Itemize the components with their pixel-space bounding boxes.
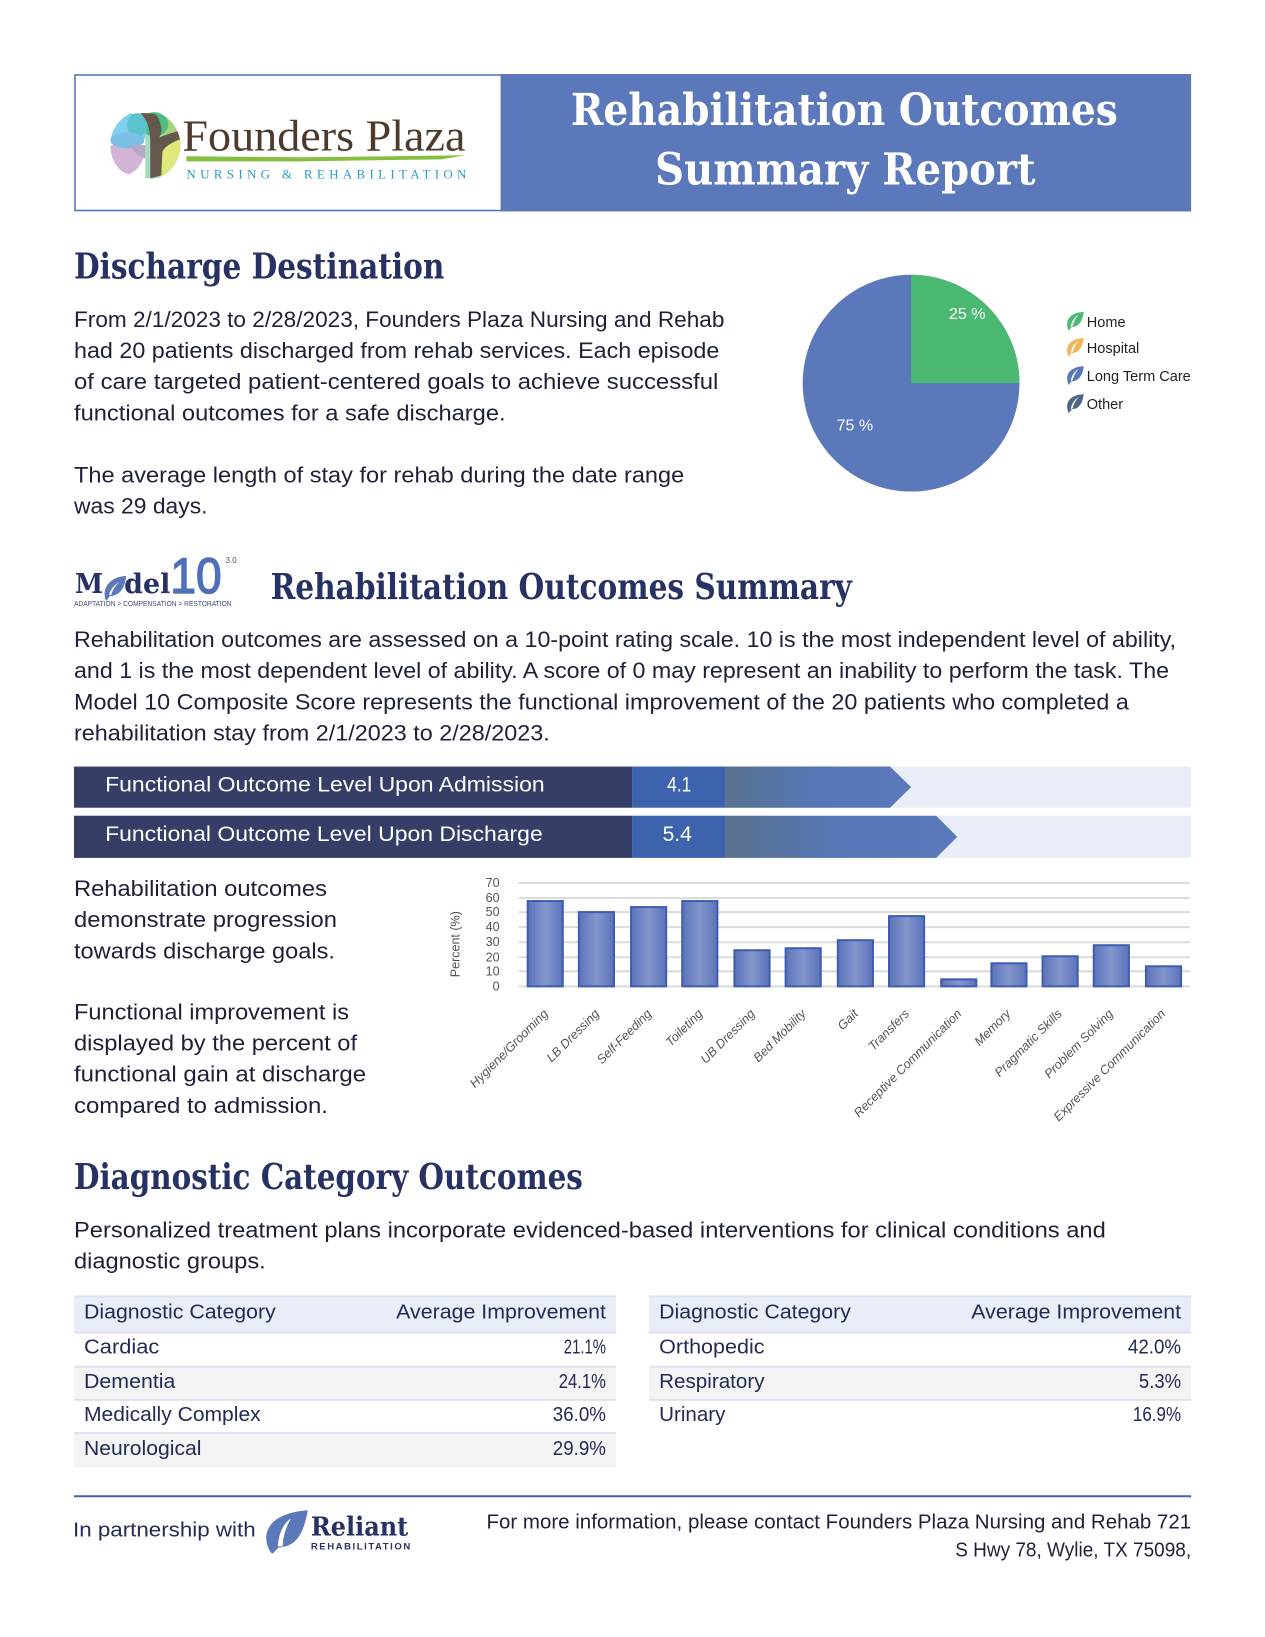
- legend: [1067, 312, 1191, 413]
- progress bar: discharge: [74, 816, 1191, 858]
- table: diagnostic categories left: 29.9%: [553, 1438, 606, 1460]
- heading: Discharge Destination: Discharge Destination: [74, 247, 444, 288]
- x axis labels: Problem Solving: [1042, 1007, 1116, 1081]
- y axis labels: 0: [493, 979, 500, 993]
- x axis labels: UB Dressing: [698, 1007, 758, 1066]
- text block: functional improvement: Functional improvement is: [74, 999, 349, 1024]
- legend item: Other: Other: [1087, 397, 1123, 413]
- progress bar: admission: 4.1: [667, 774, 691, 797]
- table: diagnostic categories left: 21.1%: [564, 1337, 606, 1359]
- logo: Reliant Rehabilitation: REHABILITATION: [311, 1541, 410, 1552]
- logo: Reliant Rehabilitation: Reliant: [311, 1512, 408, 1542]
- logo: Model 10: M: [75, 569, 103, 600]
- y axis labels: 30: [486, 935, 500, 949]
- pie chart: discharge destination: [803, 275, 1019, 492]
- text block: outcomes explanation: [74, 627, 1176, 745]
- progress bar: discharge: Functional Outcome Level Upon Discharge: [105, 823, 543, 846]
- bars: [528, 901, 1181, 986]
- x axis labels: LB Dressing: [544, 1007, 602, 1065]
- table: diagnostic categories right: 5.3%: [1139, 1371, 1181, 1393]
- footer: partnership: In partnership with: [73, 1519, 256, 1541]
- table: diagnostic categories right: Average Improvement: [971, 1302, 1182, 1324]
- text block: functional improvement: displayed by the percent of: [74, 1031, 358, 1056]
- heading: Rehabilitation Outcomes Summary: Rehabilitation Outcomes Summary: [271, 567, 853, 608]
- x axis labels: Expressive Communication: [1051, 1007, 1168, 1124]
- logo: Model 10: del: [124, 569, 170, 600]
- y axis labels: 40: [486, 920, 500, 934]
- text block: outcomes explanation: and 1 is the most dependent level of ability. A score of 0 may represent an inability to perform the task. The: [74, 658, 1169, 683]
- table: diagnostic categories right: Orthopedic: [659, 1337, 765, 1359]
- table: diagnostic categories left: Medically Complex: [84, 1404, 261, 1426]
- text block: functional improvement: Rehabilitation outcomes: [74, 876, 327, 901]
- logo: Reliant Rehabilitation: [266, 1510, 410, 1553]
- y axis labels: 50: [486, 905, 500, 919]
- table: diagnostic categories left: [74, 1297, 616, 1467]
- y axis labels: 60: [486, 891, 500, 905]
- text block: treatment plans: [74, 1217, 1106, 1273]
- table: diagnostic categories left: Diagnostic Category: [84, 1302, 276, 1324]
- text block: treatment plans: Personalized treatment plans incorporate evidenced-based interventions for clinical conditions and: [74, 1217, 1106, 1242]
- x axis labels: Gait: [835, 1006, 861, 1033]
- x axis labels: Hygiene/Grooming: [467, 1007, 551, 1090]
- text block: outcomes explanation: Model 10 Composite Score represents the functional improvement of the 20 patients who completed a: [74, 689, 1130, 714]
- logo: Founders Plaza: [110, 110, 467, 181]
- table: diagnostic categories right: 16.9%: [1133, 1404, 1181, 1426]
- table: diagnostic categories right: Diagnostic Category: [659, 1302, 851, 1324]
- x axis labels: [467, 1006, 1168, 1124]
- legend item: Home: Home: [1087, 315, 1126, 331]
- table: diagnostic categories left: 36.0%: [553, 1404, 606, 1426]
- logo: Founders Plaza: NURSING & REHABILITATION: [186, 166, 467, 181]
- x axis labels: Pragmatic Skills: [992, 1006, 1065, 1080]
- table: diagnostic categories right: 42.0%: [1128, 1337, 1181, 1359]
- table: diagnostic categories right: Respiratory: [659, 1371, 765, 1393]
- progress bar: admission: Functional Outcome Level Upon Admission: [105, 774, 545, 797]
- report title: [571, 85, 1118, 195]
- x axis labels: Memory: [972, 1006, 1014, 1049]
- footer: contact information: [487, 1511, 1191, 1561]
- x axis labels: Self-Feeding: [594, 1007, 654, 1067]
- text block: discharge summary: The average length of stay for rehab during the date range: [74, 463, 684, 488]
- text block: discharge summary: From 2/1/2023 to 2/28/2023, Founders Plaza Nursing and Rehab: [74, 307, 724, 332]
- table: diagnostic categories left: Cardiac: [84, 1337, 159, 1359]
- x axis labels: Receptive Communication: [851, 1007, 964, 1120]
- legend item: Long Term Care: Long Term Care: [1087, 369, 1191, 385]
- table: diagnostic categories right: [649, 1297, 1191, 1426]
- header banner: [75, 74, 1191, 212]
- legend item: Hospital: Hospital: [1087, 341, 1139, 357]
- table: diagnostic categories left: Average Improvement: [396, 1302, 606, 1324]
- y axis title: Percent (%): [448, 911, 462, 977]
- text block: discharge summary: [73, 307, 724, 519]
- report title: Rehabilitation Outcomes: [571, 85, 1118, 136]
- heading: Diagnostic Category Outcomes: Diagnostic Category Outcomes: [74, 1157, 583, 1198]
- x axis labels: Transfers: [866, 1006, 913, 1053]
- x axis labels: Toileting: [663, 1007, 705, 1049]
- report title: Summary Report: [655, 144, 1036, 195]
- text block: discharge summary: had 20 patients discharged from rehab services. Each episode: [74, 338, 719, 363]
- pie chart: discharge destination: 25 %: [949, 305, 986, 323]
- text block: functional improvement: towards discharge goals.: [74, 938, 335, 963]
- table: diagnostic categories left: Dementia: [84, 1371, 176, 1393]
- footer: contact information: For more information, please contact Founders Plaza Nursing and Rehab 721: [487, 1511, 1191, 1533]
- logo: Model 10: 10: [170, 548, 222, 604]
- y axis labels: 70: [486, 876, 500, 890]
- table: diagnostic categories left: 24.1%: [559, 1371, 606, 1393]
- text block: discharge summary: was 29 days.: [73, 494, 207, 519]
- text block: functional improvement: compared to admission.: [74, 1093, 328, 1118]
- text block: treatment plans: diagnostic groups.: [74, 1248, 266, 1273]
- progress bar: admission: [74, 767, 1191, 808]
- text block: outcomes explanation: Rehabilitation outcomes are assessed on a 10-point rating scale. 10 is the most independent level of ability,: [74, 627, 1176, 652]
- footer: partnership: [73, 1510, 410, 1553]
- table: diagnostic categories left: Neurological: [84, 1438, 201, 1460]
- x axis labels: Bed Mobility: [751, 1006, 809, 1065]
- table: diagnostic categories right: Urinary: [659, 1404, 725, 1426]
- y axis labels: 20: [486, 950, 500, 964]
- pie chart: discharge destination: 75 %: [837, 416, 873, 434]
- logo: Founders Plaza: Founders Plaza: [182, 111, 465, 160]
- text block: discharge summary: functional outcomes for a safe discharge.: [74, 400, 506, 425]
- text block: outcomes explanation: rehabilitation stay from 2/1/2023 to 2/28/2023.: [74, 720, 550, 745]
- logo: Model 10: 3.0: [226, 556, 237, 565]
- logo: Model 10: ADAPTATION > COMPENSATION > RESTORATION: [74, 599, 232, 608]
- y axis labels: [486, 876, 500, 993]
- bar chart: percent functional gain: [448, 876, 1190, 1124]
- footer: contact information: S Hwy 78, Wylie, TX 75098,: [955, 1539, 1191, 1561]
- y axis labels: 10: [486, 964, 500, 978]
- text block: functional improvement: functional gain at discharge: [74, 1062, 366, 1087]
- logo: Model 10: [74, 548, 237, 608]
- progress bar: discharge: 5.4: [663, 823, 692, 846]
- text block: functional improvement: demonstrate progression: [74, 907, 337, 932]
- text block: functional improvement: [74, 876, 366, 1118]
- text block: discharge summary: of care targeted patient-centered goals to achieve successful: [74, 369, 718, 394]
